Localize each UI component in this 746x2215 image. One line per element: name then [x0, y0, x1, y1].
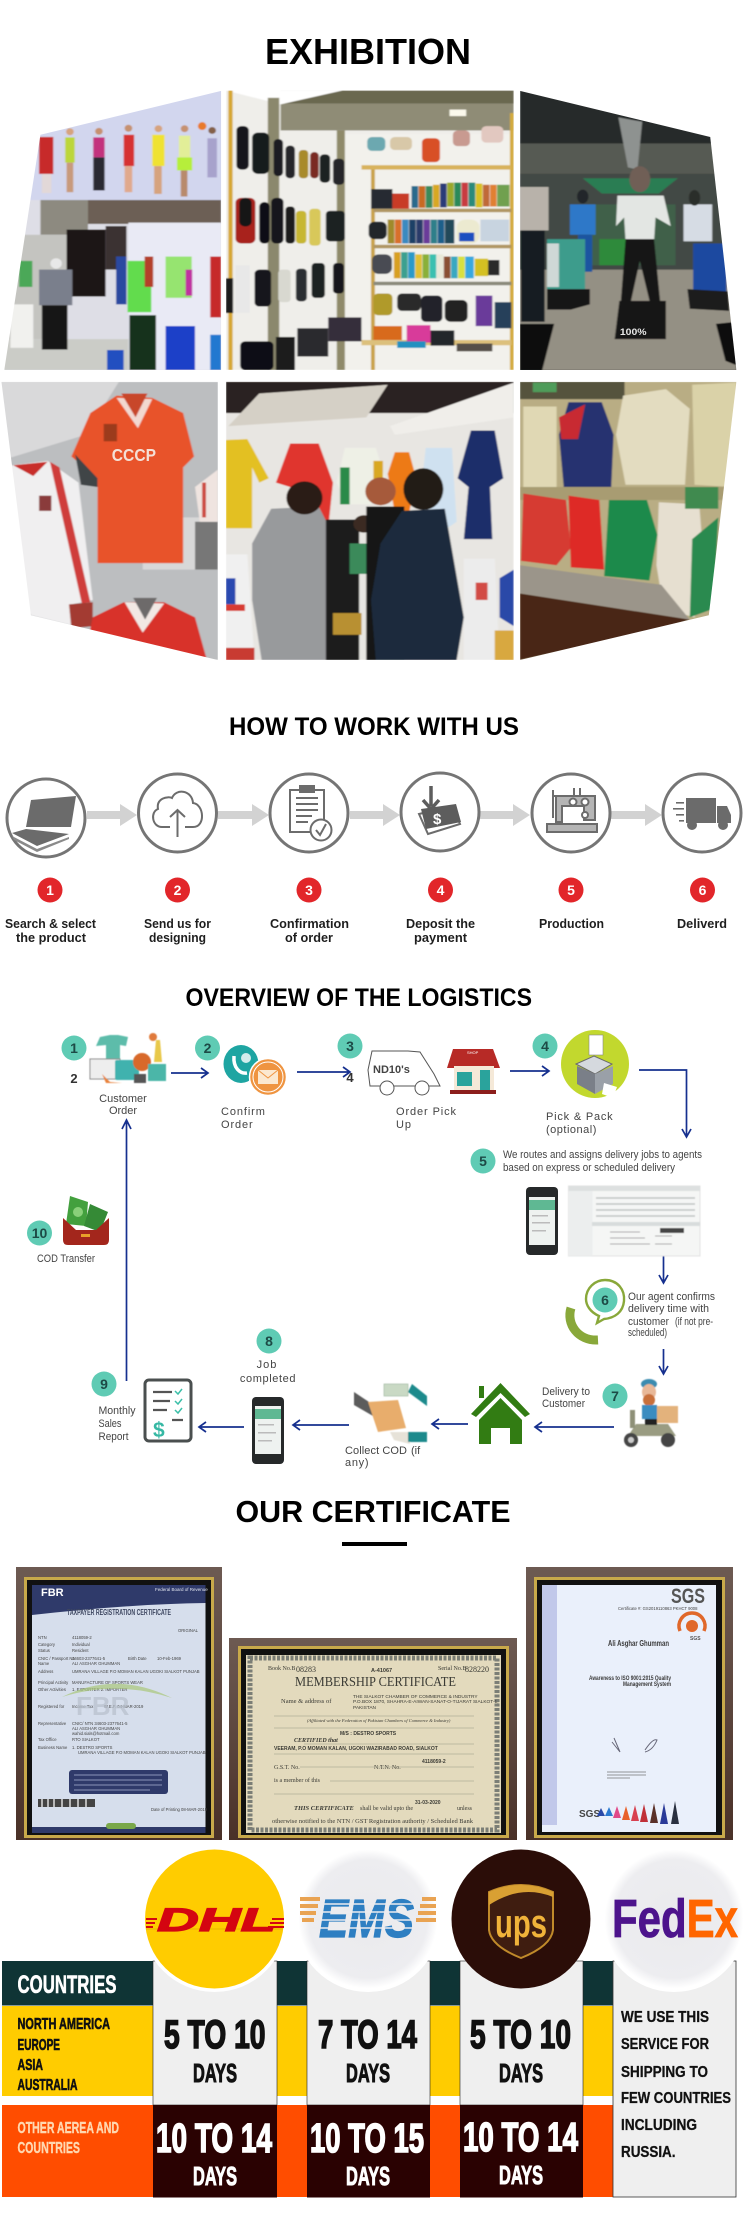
photo: visitors at shirt wall [226, 382, 514, 660]
shirt lettering: CCCP [112, 446, 156, 465]
certificate: membership: shall be valid upto the [360, 1806, 413, 1812]
step 2: send for designing [138, 774, 216, 945]
logo: UPS: ups [495, 1902, 547, 1946]
delivery times: other regions: DAYS [499, 2160, 543, 2190]
certificate: membership: A-41067 [371, 1668, 392, 1674]
certificate: FBR taxpayer registration: Date of Printing 08-MAR-2019 [151, 1807, 208, 1812]
certificate: membership: Name & address of [281, 1698, 332, 1705]
certificate: FBR taxpayer registration: 34603-2377641-5 [72, 1656, 106, 1661]
logistics step 6: agent confirms [570, 1280, 715, 1340]
step 1: search and select: the product [16, 930, 87, 945]
heading underline [342, 1542, 407, 1546]
certificate: membership: 31-03-2020 [415, 1800, 441, 1806]
icon: packing box [561, 1030, 629, 1098]
FedEx note: WE USE THIS [621, 2009, 709, 2026]
certificate: membership [229, 1638, 517, 1840]
logistics step 1: customer order: Order [109, 1105, 137, 1117]
FedEx note [621, 2009, 731, 2161]
step 2: send for designing: 2 [174, 882, 182, 898]
step 4: deposit payment: Deposit the [406, 916, 475, 931]
certificate: FBR taxpayer registration: Name [38, 1661, 50, 1666]
icon: money with arrow [419, 786, 461, 834]
certificate: membership: 828220 [465, 1665, 489, 1674]
certificate: FBR taxpayer registration: W.E.F. 04-MAR-2019 [104, 1704, 144, 1709]
logistics step 6: agent confirms: scheduled) [628, 1327, 667, 1339]
step 1: search and select: Search & select [5, 916, 97, 931]
icon: delivery truck [673, 798, 731, 830]
certificate: FBR taxpayer registration: Representative [38, 1721, 67, 1726]
certificate: membership: VEERAM, P.O MOMAN KALAN, UGOKI WAZIRABAD ROAD, SIALKOT [274, 1746, 438, 1752]
certificate: FBR taxpayer registration: UMRANA VILLAGE P.O MOMAN KALAN UGOKI SIALKOT PUNJAB [72, 1669, 200, 1674]
FedEx note: RUSSIA. [621, 2144, 676, 2161]
certificate: FBR taxpayer registration: Principal Activity [38, 1680, 69, 1685]
step 1: search and select [5, 779, 97, 945]
process arrows [87, 804, 662, 826]
SGS emblem [679, 1613, 705, 1642]
logistics step 6: agent confirms: (if not pre- [675, 1316, 713, 1328]
delivery times: other regions: DAYS [346, 2161, 390, 2191]
logistics step 7: delivery to customer: 7 [611, 1388, 619, 1404]
certificate: membership: 08283 [296, 1665, 316, 1674]
table: other regions row band [2, 2105, 613, 2197]
certificate: FBR taxpayer registration: UMRANA VILLAGE P.O MOMAN KALAN UGOKI SIALKOT PUNJAB [78, 1750, 206, 1755]
certificate: FBR taxpayer registration: Tax Office [38, 1737, 57, 1742]
step 3: confirmation [270, 774, 349, 945]
logistics step 3: order pick up: 4 [346, 1070, 354, 1085]
certificate: FBR taxpayer registration: RTO SIALKOT [72, 1737, 100, 1742]
delivery times: main regions [164, 2013, 571, 2088]
logistics step 6: agent confirms: delivery time with [628, 1303, 709, 1315]
logistics flow arrows [122, 1066, 691, 1432]
certificate: FBR taxpayer registration: Address [38, 1669, 53, 1674]
delivery times: main regions: 5 TO 10 [164, 2013, 266, 2057]
logistics step 4: pick and pack: (optional) [546, 1124, 597, 1136]
table labels: OTHER AEREA AND [18, 2120, 119, 2137]
certificate: FBR taxpayer registration: ALI ASGHAR GHUMMAN [72, 1661, 120, 1666]
certificate: membership: G.S.T. No. [274, 1765, 300, 1771]
certificate: membership: Book No.B [268, 1666, 295, 1672]
logistics step 2: confirm order: 2 [204, 1040, 212, 1056]
logistics step 6: agent confirms: 6 [601, 1292, 609, 1308]
certificate: membership: Serial No.B [438, 1666, 466, 1672]
certificate: membership: THIS CERTIFICATE [294, 1805, 354, 1812]
certificate: FBR taxpayer registration: ORIGINAL [178, 1628, 199, 1633]
shipping table [2, 1961, 736, 2198]
delivery times: other regions: 10 TO 14 [156, 2115, 272, 2161]
logistics step 9: monthly sales report: 9 [100, 1376, 108, 1392]
icon: shopping collection [90, 1033, 166, 1083]
certificate: membership: otherwise notified to the NTN / GST Registration authority / Scheduled Bank [272, 1818, 473, 1825]
logistics step 3: order pick up: Up [396, 1119, 412, 1131]
label on mannequin plinth: 100% [620, 327, 647, 338]
icon: delivery van [368, 1051, 440, 1095]
certificate: FBR taxpayer registration: 10-Feb-1969 [157, 1656, 182, 1661]
title: exhibition: EXHIBITION [265, 31, 471, 72]
logistics step 6: agent confirms: Our agent confirms [628, 1291, 715, 1303]
certificate: FBR taxpayer registration: TAXPAYER REGISTRATION CERTIFICATE [67, 1608, 171, 1617]
logistics step 1: customer order [62, 1033, 166, 1117]
logistics step 3: order pick up [338, 1034, 500, 1131]
logistics step 6: agent confirms: customer [628, 1316, 669, 1328]
carrier column: DHL [153, 1961, 277, 2198]
step 3: confirmation: of order [285, 930, 333, 945]
delivery times: main regions: DAYS [193, 2058, 237, 2088]
step 6: delivered: 6 [699, 882, 707, 898]
table labels [18, 1971, 119, 2157]
certificate: FBR taxpayer registration: FBR [76, 1691, 130, 1721]
step 6: delivered [663, 774, 741, 931]
logo: EMS: EMS [319, 1889, 414, 1949]
screenshot: dispatch software [568, 1186, 700, 1256]
logistics step 2: confirm order: Order [221, 1119, 254, 1131]
certificate: FBR taxpayer registration: Resident [72, 1648, 89, 1653]
table labels: COUNTRIES [18, 1971, 116, 1999]
heading: overview of the logistics: OVERVIEW OF THE LOGISTICS [186, 984, 532, 1012]
carrier column: UPS [460, 1961, 583, 2198]
table labels: EUROPE [18, 2037, 60, 2054]
certificate: membership: M/S : DESTRO SPORTS [340, 1731, 397, 1737]
certificate: FBR taxpayer registration: Category [38, 1642, 56, 1647]
logistics step 10: cod transfer: 10 [32, 1225, 47, 1241]
delivery times: other regions: DAYS [193, 2161, 237, 2191]
certificate: FBR taxpayer registration: Status [38, 1648, 50, 1653]
logo: UPS [452, 1850, 590, 1988]
certificate: FBR taxpayer registration: wahid.sials@hotmail.com [72, 1731, 120, 1736]
logistics step 9: monthly sales report: Sales [98, 1418, 122, 1430]
step 5: production [532, 774, 610, 931]
certificate: FBR taxpayer registration: MANUFACTURE OF SPORTS WEAR [72, 1680, 143, 1685]
certificate: membership: (Affiliated with the Federation of Pakistan Chambers of Commerce & Industry) [307, 1718, 451, 1723]
logistics step 8: job completed: completed [240, 1373, 296, 1385]
logistics step 4: pick and pack: Pick & Pack [546, 1111, 614, 1123]
icon: courier on scooter [624, 1379, 678, 1447]
icon: phone app [526, 1187, 558, 1255]
logistics step 2: confirm order: Confirm [221, 1106, 266, 1118]
certificate: FBR taxpayer registration: ALI ASGHAR GHUMMAN [72, 1726, 120, 1731]
icon: laptop [12, 796, 76, 852]
step 1: search and select: 1 [46, 882, 54, 898]
step 4: deposit payment [401, 773, 479, 945]
certificate: FBR taxpayer registration: 4118059-2 [72, 1635, 92, 1640]
logistics step 4: pick and pack: 4 [541, 1038, 549, 1054]
icon: sewing machine [547, 788, 597, 832]
logo: EMS [295, 1846, 441, 1992]
photo grid: exhibition [0, 87, 739, 660]
certificate: membership: THE SIALKOT CHAMBER OF COMMERCE & INDUSTRY [353, 1694, 478, 1700]
logistics step 9: monthly sales report: Monthly [98, 1405, 136, 1417]
icon: clipboard with check [290, 786, 332, 840]
logistics step 8: job completed: 8 [265, 1333, 273, 1349]
logistics step 7: delivery to customer: Delivery to [542, 1386, 590, 1398]
icon: shop [447, 1049, 500, 1094]
icon: collect cash on delivery [354, 1384, 427, 1444]
table labels: NORTH AMERICA [18, 2016, 110, 2033]
logistics step 5: routing jobs: 5 [479, 1153, 487, 1169]
certificate: SGS: Ali Asghar Ghumman [608, 1639, 669, 1648]
certificate: membership: 4118059-2 [422, 1759, 446, 1765]
photo: gloves and hats stand [226, 90, 514, 370]
icon: wallet with cash [63, 1196, 109, 1245]
delivery times: other regions: 10 TO 14 [463, 2114, 578, 2160]
icon: shop: SHOP [467, 1050, 479, 1055]
certificate: SGS [526, 1567, 733, 1840]
logistics step 1: customer order: 2 [70, 1071, 78, 1086]
step 3: confirmation: Confirmation [270, 916, 349, 931]
photo: mannequins in store [520, 87, 739, 374]
delivery times: other regions [156, 2114, 578, 2191]
certificate: membership: PAKISTAN [353, 1705, 377, 1711]
label: collect cod: (if [411, 1445, 421, 1457]
certificate: membership: is a member of this [274, 1777, 321, 1784]
icon: cloud upload [153, 792, 202, 837]
logistics step 7: delivery to customer: Customer [542, 1398, 585, 1410]
logo: FedEx [601, 1846, 746, 1992]
logistics step 5: routing jobs: We routes and assigns delivery jobs to agents [503, 1149, 702, 1161]
logistics step 10: cod transfer [27, 1196, 109, 1265]
photo: retro red shirts [0, 382, 219, 660]
certificate: FBR taxpayer registration: Birth Date [128, 1656, 147, 1661]
carrier column: FedEx [613, 1961, 736, 2197]
table labels: COUNTRIES [18, 2140, 80, 2157]
carrier column: EMS [307, 1961, 430, 2198]
certificate: FBR taxpayer registration: NTN [38, 1635, 47, 1640]
certificate: membership: P.O.BOX 1870, SHAHRA-E-AIWAN-SANAT-O-TIJARAT SIALKOT-1, [353, 1699, 499, 1705]
step 5: production: 5 [567, 882, 575, 898]
certificate: FBR taxpayer registration: CNIC/ NTN 34603-2377641-5 [72, 1721, 128, 1726]
label: collect cod: Collect COD [345, 1445, 407, 1457]
icon: delivery van: ND10's [373, 1064, 410, 1076]
step 2: send for designing: Send us for [144, 916, 211, 931]
certificate: SGS: SGS [579, 1809, 600, 1820]
table labels: AUSTRALIA [18, 2077, 78, 2094]
step 6: delivered: Deliverd [677, 916, 727, 931]
step 4: deposit payment: 4 [437, 882, 445, 898]
SGS emblem: SGS [690, 1636, 701, 1642]
delivery times: other regions: 10 TO 15 [310, 2115, 424, 2161]
logistics step 2: confirm order [195, 1036, 286, 1131]
logo: DHL: DHL [157, 1902, 276, 1938]
icon: house [471, 1383, 530, 1444]
certificate: FBR taxpayer registration: CNIC / Passport No [38, 1656, 75, 1661]
certificate: membership: unless [457, 1806, 473, 1812]
delivery times: main regions: DAYS [499, 2058, 543, 2088]
logistics step 5: routing jobs: based on express or scheduled delivery [503, 1162, 675, 1174]
FedEx note: SHIPPING TO [621, 2064, 708, 2081]
logo: DHL [142, 1846, 288, 1992]
certificate: FBR taxpayer registration: Other Activities [38, 1687, 66, 1692]
logistics step 10: cod transfer: COD Transfer [37, 1253, 95, 1265]
logistics step 3: order pick up: 3 [346, 1038, 354, 1054]
heading: how to work with us: HOW TO WORK WITH US [229, 713, 519, 741]
logistics step 9: monthly sales report [92, 1372, 191, 1443]
table: header row band [2, 1961, 613, 2006]
certificate: FBR taxpayer registration: Individual [72, 1642, 90, 1647]
step 4: deposit payment: payment [414, 930, 468, 945]
certificate: FBR taxpayer registration: Business Name [38, 1745, 68, 1750]
logistics step 1: customer order: 1 [70, 1040, 78, 1056]
certificate: FBR taxpayer registration: FBR [41, 1587, 64, 1599]
photo: shirt display case [520, 382, 739, 660]
icon: phone app [252, 1397, 284, 1464]
logistics step 8: job completed: Job [257, 1359, 277, 1371]
step 2: send for designing: designing [149, 930, 206, 945]
certificate: FBR taxpayer registration [16, 1567, 222, 1840]
certificate: FBR taxpayer registration: 1. EXPORTER 2. IMPORTER [72, 1687, 127, 1692]
certificate: membership: MEMBERSHIP CERTIFICATE [295, 1675, 456, 1690]
step 3: confirmation: 3 [305, 882, 313, 898]
certificate: SGS: Certificate #: GS2019110863 PKHCT 9008 [618, 1606, 698, 1611]
heading: our certificate: OUR CERTIFICATE [236, 1494, 510, 1529]
delivery times: main regions: DAYS [346, 2058, 390, 2088]
icon: phone and mail [224, 1045, 286, 1096]
certificate: SGS: Awareness to ISO 9001:2015 Quality [589, 1676, 672, 1682]
delivery times: main regions: 5 TO 10 [470, 2013, 571, 2057]
logistics step 5: routing jobs [470, 1148, 702, 1256]
icon: phone with speech ring [570, 1280, 624, 1340]
label: collect cod [345, 1445, 421, 1469]
FedEx note: INCLUDING [621, 2117, 697, 2134]
table labels: ASIA [18, 2057, 43, 2074]
certificate: membership: CERTIFIED that [294, 1738, 338, 1744]
icon: sales report sheet: $ [153, 1419, 165, 1442]
certificate: membership: N.T.N. No. [374, 1765, 401, 1771]
logistics step 8: job completed [240, 1328, 296, 1464]
certificate: FBR taxpayer registration: 1. DESTRO SPORTS [72, 1745, 113, 1750]
label: collect cod: any) [345, 1457, 369, 1469]
logistics step 1: customer order: Customer [99, 1093, 147, 1105]
delivery times: main regions: 7 TO 14 [318, 2013, 418, 2057]
photo: sports banner booth [0, 87, 224, 374]
certificate: FBR taxpayer registration: Registered for [38, 1704, 65, 1709]
logistics step 9: monthly sales report: Report [98, 1431, 128, 1443]
certificate: SGS: SGS [671, 1585, 705, 1608]
table: main regions row band [2, 2006, 613, 2096]
step 5: production: Production [539, 916, 604, 931]
FedEx note: SERVICE FOR [621, 2036, 709, 2053]
certificate: SGS: Management System [623, 1682, 671, 1688]
logistics step 4: pick and pack [532, 1030, 629, 1136]
certificate: FBR taxpayer registration: Federal Board of Revenue [155, 1587, 208, 1592]
icon: money with arrow: $ [433, 811, 442, 828]
certificate: FBR taxpayer registration: Income Tax [72, 1704, 94, 1709]
logistics step 3: order pick up: Order Pick [396, 1106, 457, 1118]
logistics step 7: delivery to customer [542, 1379, 678, 1447]
